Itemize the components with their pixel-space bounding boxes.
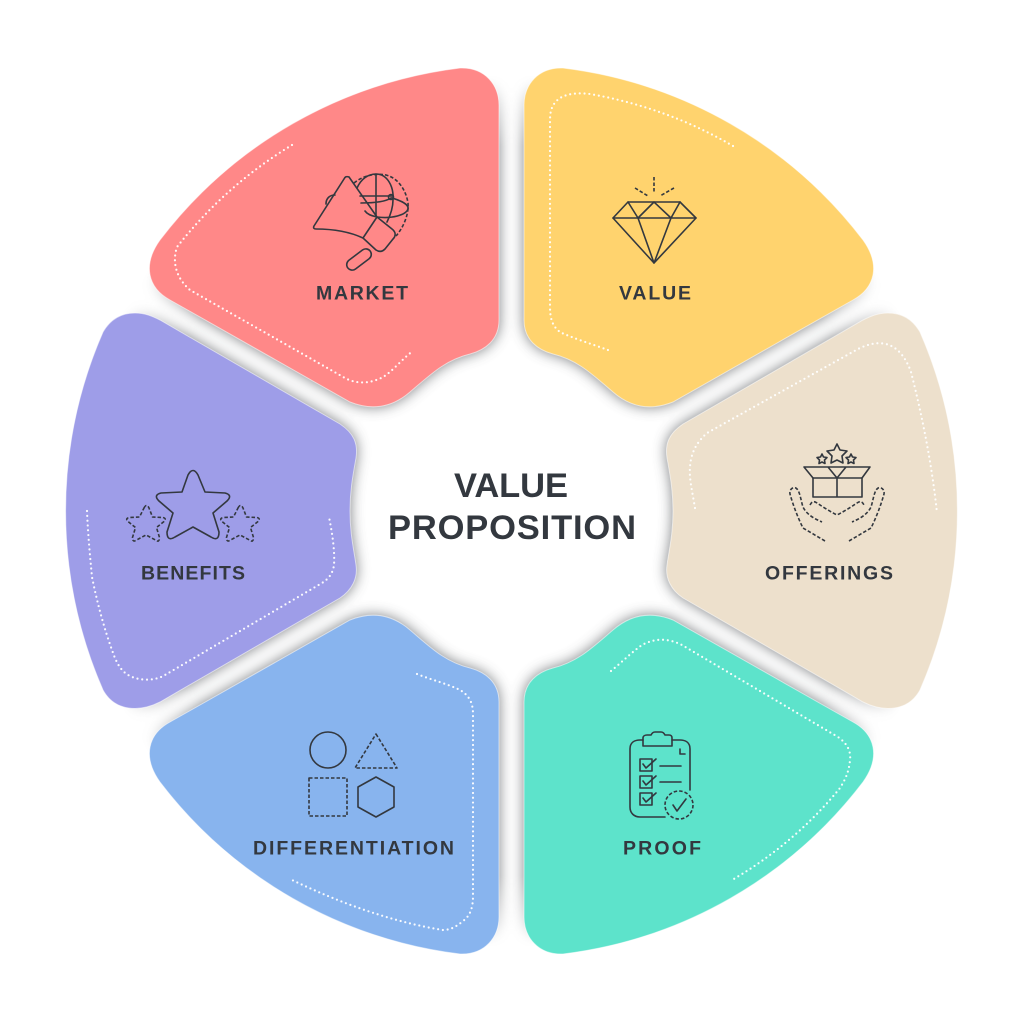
icon: three stars <box>127 470 259 541</box>
panel: differentiation <box>149 615 499 954</box>
label: value: VALUE <box>619 282 691 304</box>
panel: market <box>149 68 499 407</box>
panel: value <box>524 68 874 407</box>
icon: gift box in hands <box>790 444 884 541</box>
title: PROPOSITION <box>388 509 636 547</box>
icon: four shapes <box>309 732 397 817</box>
panel: offerings <box>666 313 957 708</box>
panel: proof <box>524 615 874 954</box>
label: offerings: OFFERINGS <box>765 562 893 584</box>
label: differentiation: DIFFERENTIATION <box>253 838 454 860</box>
label: proof: PROOF <box>623 838 701 860</box>
icon: diamond <box>613 177 696 263</box>
label: market: MARKET <box>316 282 408 304</box>
icon: checklist clipboard <box>630 732 693 819</box>
label: benefits: BENEFITS <box>141 562 245 584</box>
title: VALUE <box>454 467 568 505</box>
icon: megaphone and globe <box>314 174 408 272</box>
title <box>388 467 636 547</box>
panel: benefits <box>66 313 357 708</box>
